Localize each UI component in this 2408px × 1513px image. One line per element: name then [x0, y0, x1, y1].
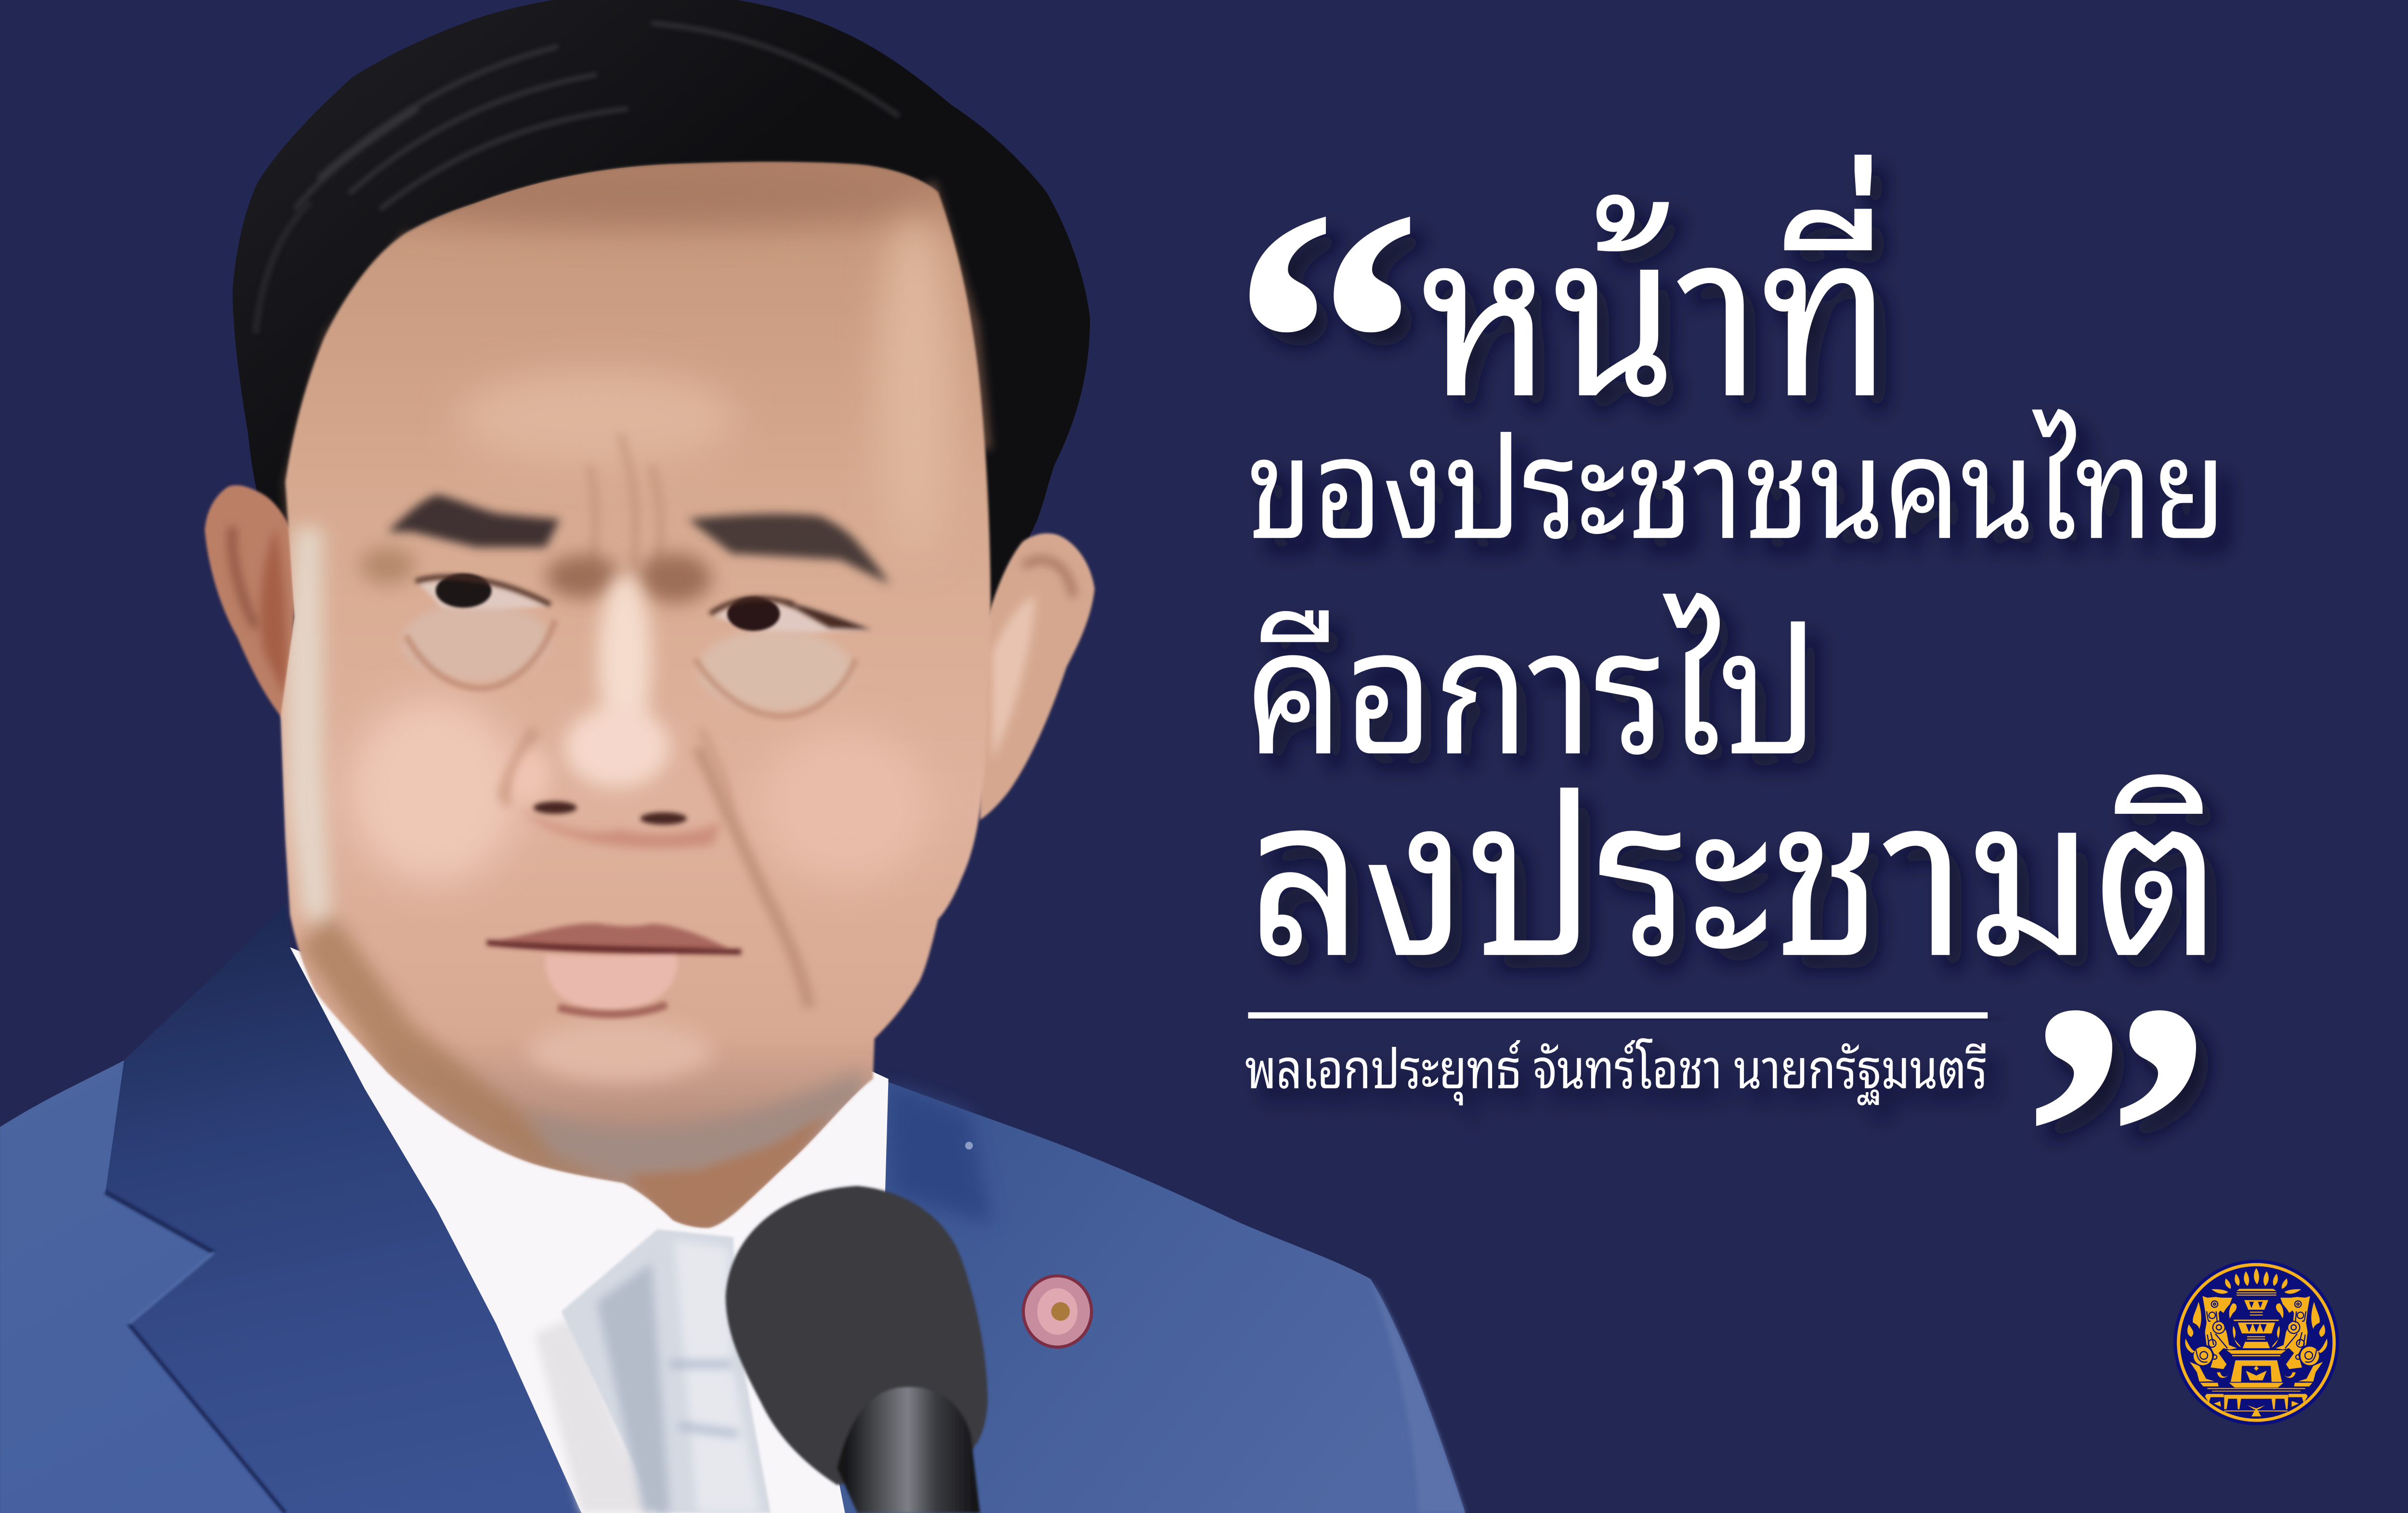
- heading line 4: ลงประชามติ: [1248, 680, 2222, 1032]
- heading line 1: หน้าที่: [1420, 112, 1892, 475]
- forehead wrinkle: [589, 434, 661, 574]
- right eye: [710, 597, 871, 632]
- shirt collar: [290, 947, 889, 1513]
- left lion and ornaments: [2185, 1271, 2249, 1407]
- left brow: [388, 495, 560, 547]
- face and neck: [281, 162, 991, 1228]
- opening quotation mark: “: [1231, 130, 1423, 554]
- left edge highlight: [285, 527, 332, 930]
- right lion and ornaments: [2264, 1271, 2328, 1407]
- necktie: [561, 1229, 771, 1513]
- double chin: [525, 1070, 862, 1183]
- nasolabial creases: [698, 747, 810, 1008]
- divider rule: [1248, 1012, 1988, 1018]
- left eye bag: [402, 603, 555, 688]
- nose: [502, 574, 729, 848]
- hair: [233, 0, 1090, 666]
- microphone: [726, 1186, 988, 1513]
- quotation text block: [1231, 112, 2226, 1348]
- suit jacket: [0, 904, 1465, 1513]
- chin highlight: [527, 1020, 713, 1082]
- neck: [628, 1113, 829, 1228]
- attribution: พลเอกประยุทธ์ จันทร์โอชา นายกรัฐมนตรี: [1245, 1021, 1988, 1108]
- microphone handle: [837, 1387, 980, 1513]
- microphone foam: [726, 1186, 988, 1485]
- heading line 3: คือการไป: [1245, 537, 1819, 815]
- inner brow shadows: [360, 547, 712, 603]
- closing quotation mark: ”: [2022, 924, 2213, 1348]
- cheek highlights: [349, 698, 930, 884]
- right eye bag: [694, 629, 856, 716]
- heading line 2: ของประชาชนคนไทย: [1246, 364, 2226, 587]
- right ear: [980, 534, 1095, 820]
- portrait photo: [0, 0, 1465, 1513]
- government seal: [2173, 1260, 2339, 1425]
- lapel pin: [1023, 1276, 1091, 1347]
- forehead shading: [357, 163, 952, 558]
- jaw shading along collar: [298, 914, 605, 1178]
- left ear: [205, 485, 298, 726]
- left eye: [416, 574, 550, 609]
- mouth: [487, 924, 741, 1014]
- right brow: [688, 514, 890, 585]
- urn on pedestal: [2207, 1268, 2308, 1416]
